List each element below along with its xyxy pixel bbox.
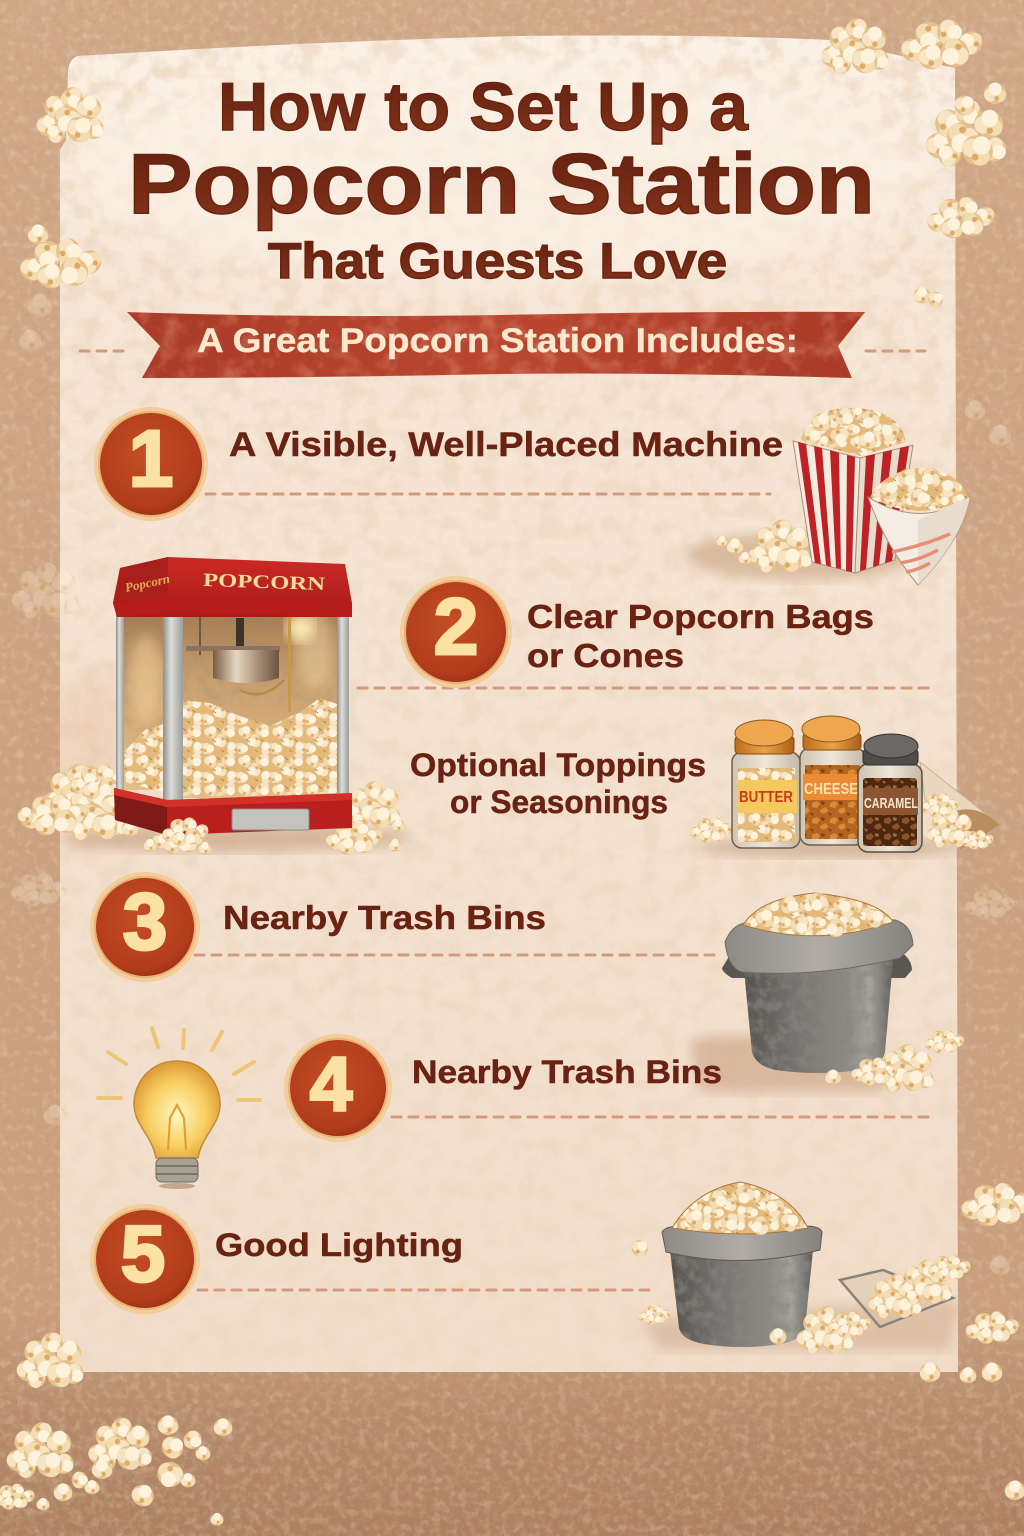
label 1: A Visible, Well-Placed Machine	[229, 426, 783, 464]
badge 4: 4	[310, 1042, 352, 1127]
title	[128, 69, 875, 289]
glass cabinet and popcorn	[124, 610, 338, 798]
caramel jar	[858, 734, 922, 852]
badge 2: 2	[434, 582, 478, 671]
spilled popcorn left	[17, 760, 212, 856]
popcorn mound in bin	[743, 890, 893, 940]
badge 2	[400, 576, 512, 688]
steel posts	[116, 610, 349, 800]
faded popcorn in the background	[8, 294, 1017, 1275]
decorative popcorn: bottom right	[920, 1183, 1024, 1500]
machine roof with sign: POPCORN	[203, 570, 326, 595]
cheese jar: CHEESE	[804, 781, 858, 798]
step 3: badge and label	[90, 872, 715, 982]
illustration: metal bucket with popcorn and scoop	[628, 1182, 973, 1358]
label 3: Nearby Trash Bins	[223, 899, 546, 936]
badge 1: 1	[129, 414, 173, 503]
label 4: Nearby Trash Bins	[412, 1054, 722, 1090]
decorative popcorn: top right	[819, 14, 1011, 309]
label 5: Good Lighting	[215, 1227, 463, 1263]
badge 5	[90, 1204, 200, 1314]
label 2: or Cones	[527, 637, 684, 674]
paper cone	[868, 464, 970, 585]
badge 1	[94, 407, 208, 521]
butter jar: BUTTER	[739, 789, 793, 806]
step 2: badge and label	[358, 576, 932, 688]
popcorn mound in bucket	[672, 1182, 808, 1238]
illustration: striped popcorn box and cone	[685, 404, 970, 585]
badge 4	[284, 1034, 392, 1142]
spilled popcorn	[825, 1030, 966, 1096]
step 4: lightbulb icon	[98, 1028, 260, 1189]
butter jar	[732, 720, 800, 848]
label: optional toppings: or Seasonings	[450, 784, 668, 820]
title: How to Set Up a	[218, 69, 749, 145]
panel: parchment card	[50, 36, 958, 1372]
title: Popcorn Station	[128, 137, 875, 232]
decorative popcorn: bottom	[0, 1328, 232, 1526]
label 2: Clear Popcorn Bags	[527, 598, 874, 635]
machine base	[114, 788, 352, 848]
cheese jar	[800, 716, 865, 845]
badge 3: 3	[123, 877, 167, 966]
spilled popcorn right	[323, 778, 405, 857]
spilled bag	[918, 762, 1000, 851]
label: optional toppings	[410, 747, 706, 820]
banner: A Great Popcorn Station Includes: A Great Popcorn Station Includes:	[197, 322, 798, 360]
illustration: red popcorn machine	[17, 557, 410, 857]
spilled popcorn	[628, 1236, 873, 1358]
bucket	[662, 1226, 822, 1347]
label 2	[527, 598, 874, 674]
title: That Guests Love	[268, 233, 727, 289]
step 4: badge and label	[284, 1034, 930, 1142]
metal scoop	[840, 1255, 973, 1327]
decorative popcorn: left	[15, 83, 108, 292]
step 5: badge and label	[90, 1204, 650, 1314]
illustration: trash bin with popcorn	[690, 890, 966, 1096]
machine roof with sign	[113, 557, 352, 617]
badge 5: 5	[121, 1209, 165, 1298]
popcorn box	[793, 404, 913, 573]
caramel jar: CARAMEL	[864, 795, 918, 812]
label: optional toppings: Optional Toppings	[410, 747, 706, 783]
badge 3	[90, 872, 200, 982]
illustration: seasoning jars	[688, 716, 1000, 858]
kettle	[186, 618, 284, 694]
machine roof with sign: Popcorn	[124, 571, 171, 595]
banner: A Great Popcorn Station Includes	[127, 312, 865, 378]
bin body	[722, 918, 913, 1073]
step 1: badge and label	[94, 407, 783, 521]
